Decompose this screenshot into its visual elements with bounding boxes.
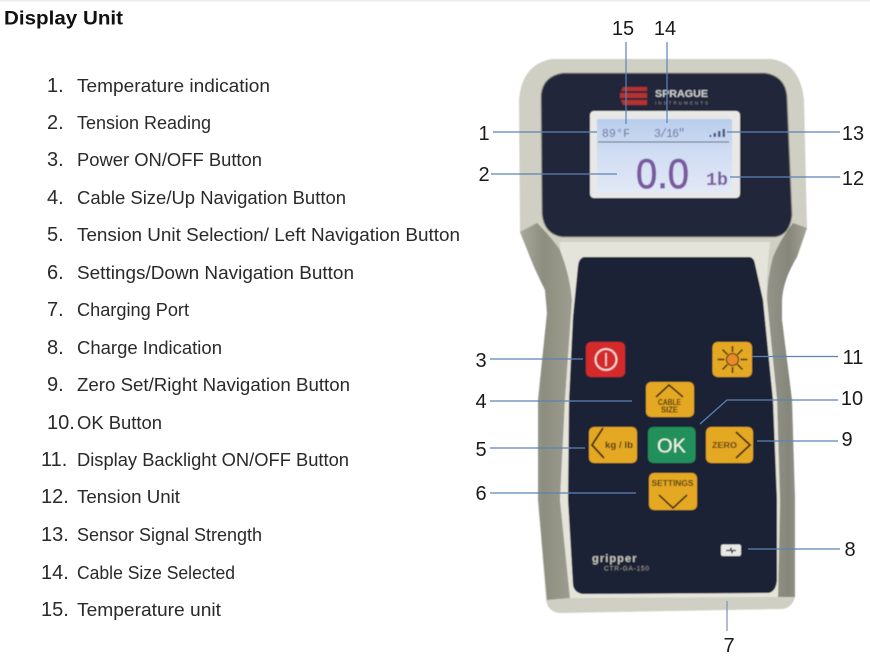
LCD screen <box>590 111 740 198</box>
button: kg/lb <box>589 427 637 463</box>
brand text: gripper: CTR-GA-150 <box>604 566 649 572</box>
callout numbers: 12 <box>842 168 864 190</box>
numbered list of parts: OK Button <box>77 413 162 433</box>
numbered list of parts: 6. <box>47 262 64 284</box>
heading: Display Unit <box>4 8 124 30</box>
button: OK <box>648 427 696 463</box>
device body silhouette <box>519 59 807 613</box>
numbered list of parts: Power ON/OFF Button <box>77 150 262 170</box>
device right grip <box>767 223 807 597</box>
button: cable size: SIZE <box>661 406 679 414</box>
numbered list of parts: Temperature indication <box>77 76 270 96</box>
numbered list of parts: Settings/Down Navigation Button <box>77 263 354 283</box>
LCD screen: 3/16" <box>654 128 685 141</box>
callout numbers: 15 <box>612 18 634 40</box>
callout numbers: 5 <box>475 439 487 461</box>
callout numbers: 11 <box>843 347 863 369</box>
numbered list of parts: 3. <box>47 149 64 171</box>
numbered list of parts: Tension Reading <box>77 113 211 133</box>
button: cable size <box>646 382 694 417</box>
brand text: gripper <box>592 553 649 572</box>
logo: Sprague Instruments: INSTRUMENTS <box>655 100 708 106</box>
button: settings <box>649 473 697 510</box>
numbered list of parts: 13. <box>41 524 69 546</box>
LCD screen: 0.0 <box>636 150 689 197</box>
callout numbers: 2 <box>478 164 490 186</box>
button: cable size: CABLE <box>658 398 682 407</box>
numbered list of parts: Display Backlight ON/OFF Button <box>77 450 349 470</box>
numbered list of parts: 14. <box>41 562 69 584</box>
logo: Sprague Instruments: SPRAGUE <box>655 89 708 100</box>
numbered list of parts: 10. <box>47 412 75 434</box>
LCD screen: 1b <box>706 171 728 191</box>
button: backlight <box>712 342 752 377</box>
button: power <box>586 342 625 377</box>
numbered list of parts: Tension Unit <box>77 487 180 507</box>
numbered list of parts: Temperature unit <box>77 600 221 620</box>
top dark panel <box>541 73 792 237</box>
numbered list of parts: 9. <box>47 374 64 396</box>
callout numbers: 8 <box>844 539 856 561</box>
inner light band <box>560 242 780 598</box>
button: zero: ZERO <box>712 441 737 450</box>
button: OK: OK <box>657 436 687 458</box>
callout numbers <box>475 18 864 656</box>
numbered list of parts: 8. <box>47 337 64 359</box>
numbered list of parts: 4. <box>47 187 64 209</box>
numbered list of parts: Cable Size/Up Navigation Button <box>77 188 346 208</box>
callout numbers: 1 <box>478 123 490 145</box>
numbered list of parts: 11. <box>41 449 67 471</box>
numbered list of parts: 2. <box>47 112 64 134</box>
button: zero <box>706 427 753 463</box>
callout numbers: 4 <box>475 391 487 413</box>
numbered list of parts: Charge Indication <box>77 338 222 358</box>
device left grip <box>520 223 572 600</box>
numbered list of parts: Cable Size Selected <box>77 563 235 583</box>
callout numbers: 3 <box>475 350 487 372</box>
button: kg/lb: kg / lb <box>605 440 633 451</box>
numbered list of parts: 12. <box>41 486 69 508</box>
brand text: gripper: gripper <box>592 553 638 565</box>
callout numbers: 10 <box>841 388 863 410</box>
lower dark panel <box>568 257 777 594</box>
signal bars <box>710 129 725 137</box>
callout lines <box>490 42 840 631</box>
numbered list of parts: 15. <box>41 599 69 621</box>
numbered list of parts: Zero Set/Right Navigation Button <box>77 375 350 395</box>
numbered list of parts: 7. <box>47 299 64 321</box>
numbered list of parts: Tension Unit Selection/ Left Navigation Button <box>77 225 460 245</box>
numbered list of parts <box>41 75 460 621</box>
callout numbers: 13 <box>842 123 864 145</box>
numbered list of parts: 1. <box>47 75 64 97</box>
logo: Sprague Instruments <box>620 87 708 106</box>
button: settings: SETTINGS <box>652 479 694 488</box>
numbered list of parts: Sensor Signal Strength <box>77 525 262 545</box>
device illustration <box>519 59 807 613</box>
LCD screen: 89°F <box>602 128 630 141</box>
callout numbers: 14 <box>654 18 676 40</box>
callout numbers: 6 <box>475 483 487 505</box>
charge indicator icon <box>721 544 741 556</box>
callout numbers: 9 <box>841 429 853 451</box>
numbered list of parts: Charging Port <box>77 300 189 320</box>
numbered list of parts: 5. <box>47 224 64 246</box>
